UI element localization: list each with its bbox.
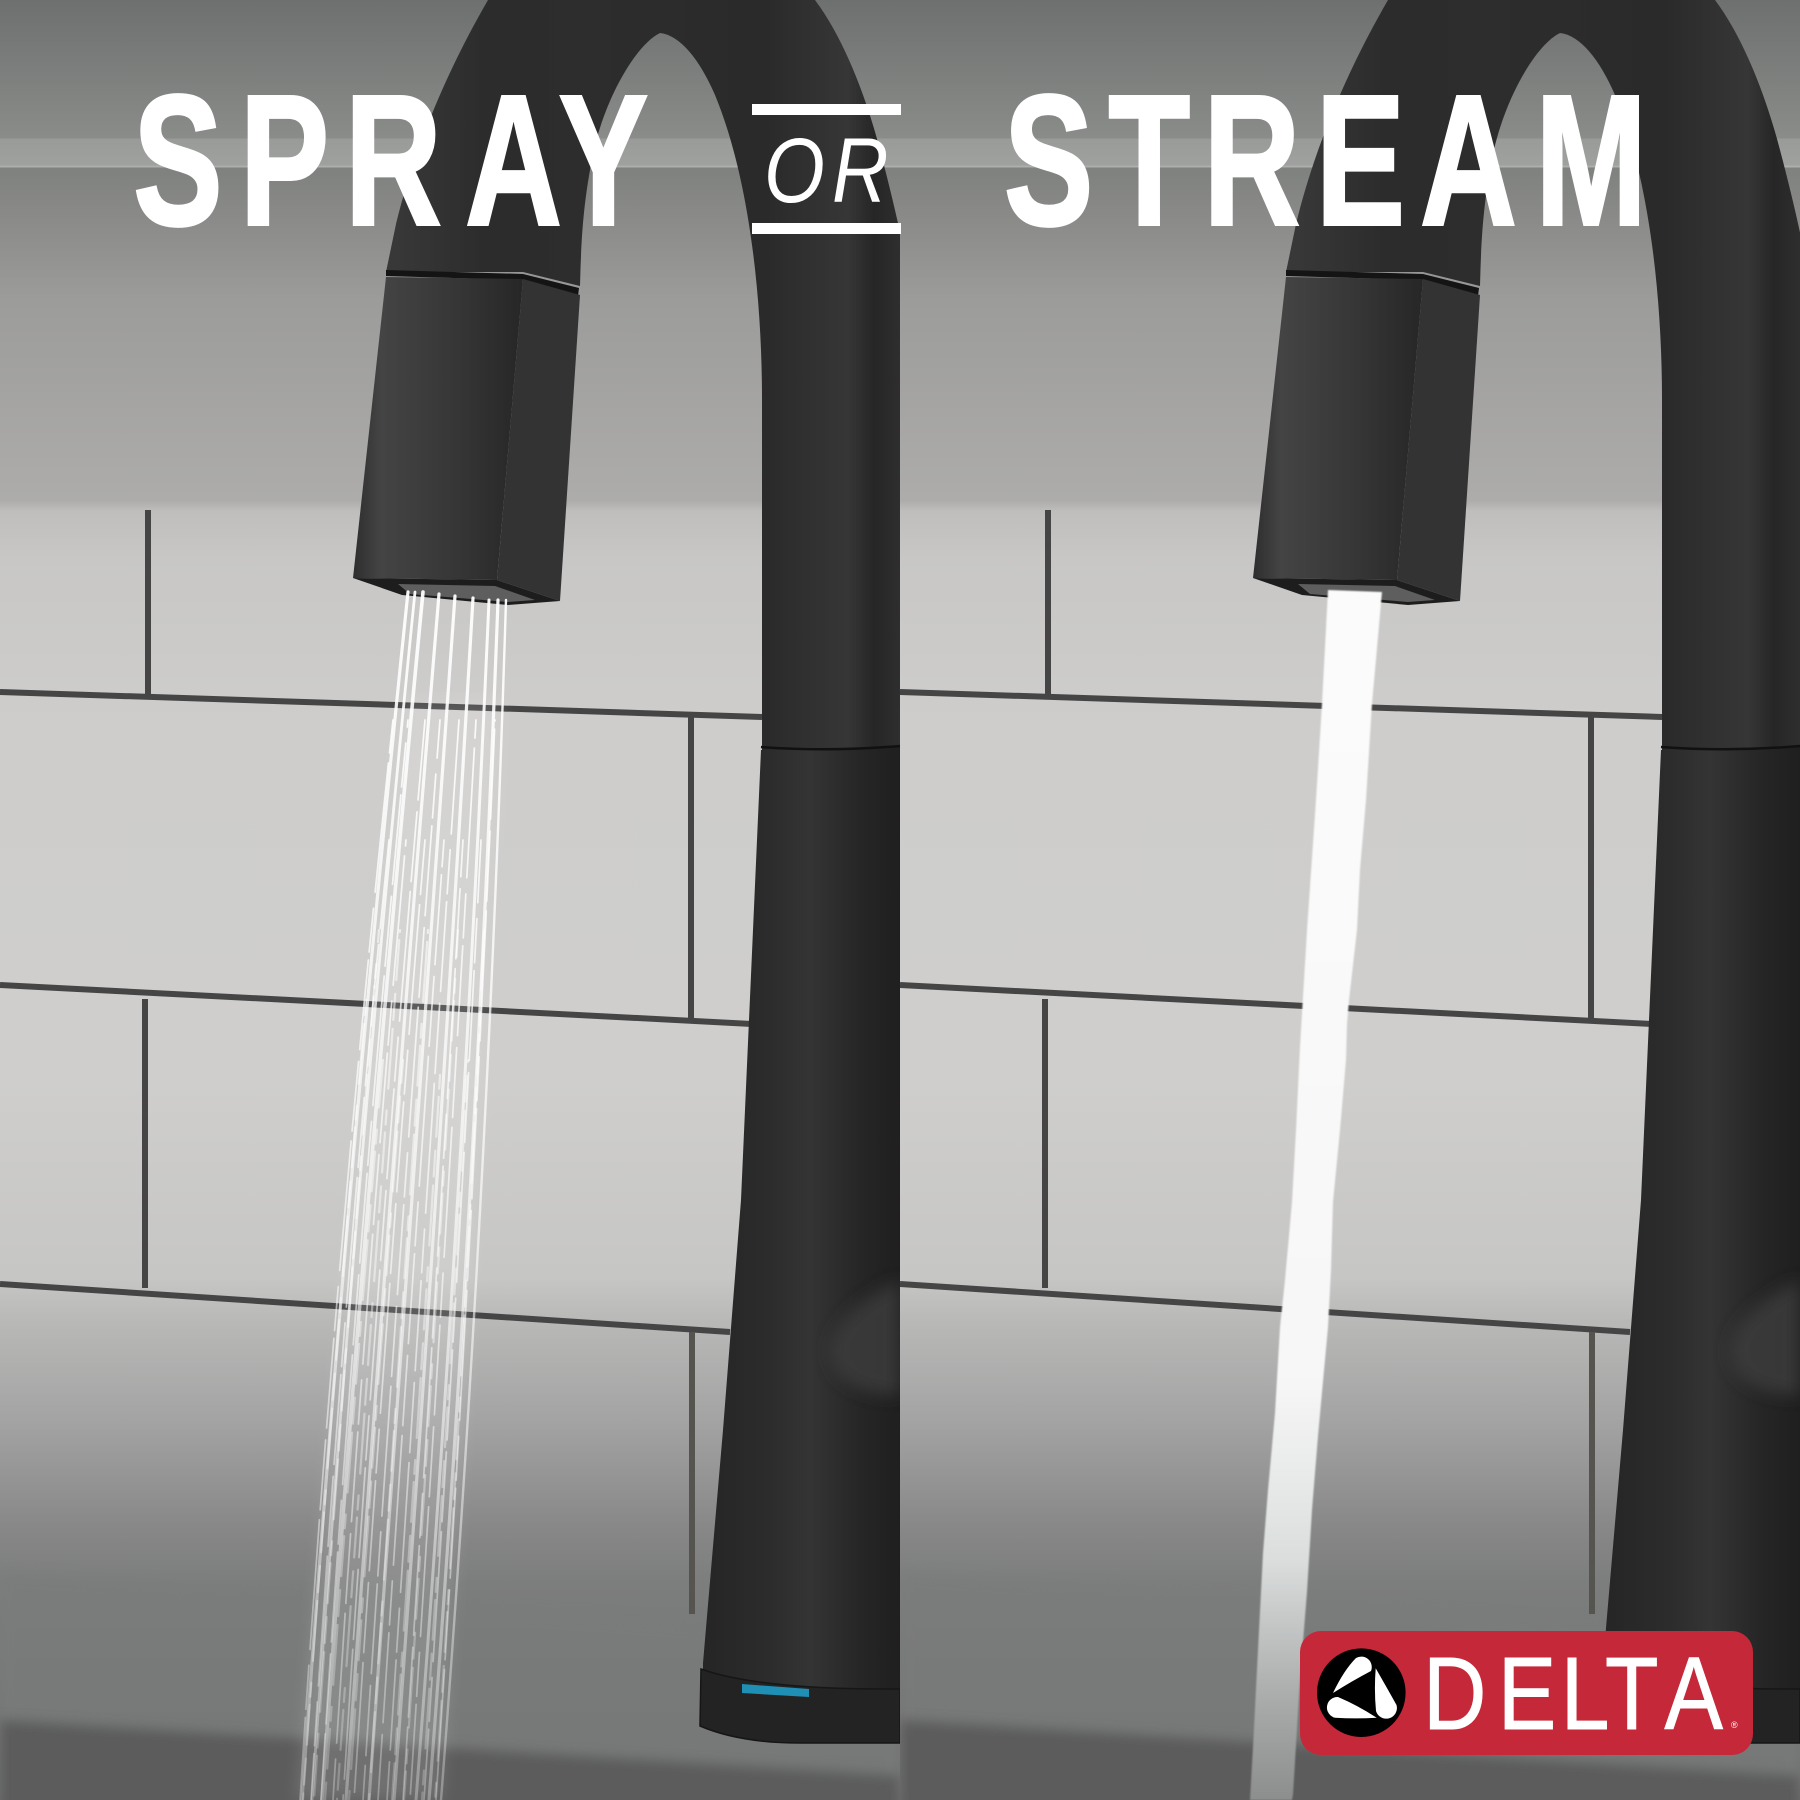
blue LED indicator: [742, 1684, 809, 1697]
spray haze: [296, 700, 500, 1800]
tile grout lines: [900, 510, 1662, 1614]
spray head collar: [1286, 270, 1479, 296]
OR text: OR: [764, 120, 888, 222]
faucet body: [703, 746, 900, 1710]
icon: Delta triangle mark: [1317, 1648, 1406, 1737]
sink edge: [900, 1720, 1800, 1800]
heading: SPRAY: SPRAY: [133, 57, 648, 265]
faucet arch and stem: [1286, 0, 1800, 750]
neck joint: [761, 746, 900, 749]
spray head side face: [497, 279, 580, 601]
badge: OR: [752, 104, 901, 234]
spray head collar: [386, 270, 579, 296]
registered mark: ®: [1731, 1720, 1738, 1730]
wall and tile background: [0, 0, 900, 1800]
tile grout lines: [0, 510, 762, 1614]
logo background: [1300, 1631, 1753, 1755]
wordmark: DELTA: [1423, 1636, 1723, 1752]
aerator nozzles: [1298, 584, 1435, 602]
Delta logo badge: [1300, 1631, 1753, 1755]
spray head front face: [353, 277, 523, 580]
aerator: [353, 578, 560, 605]
spray head side face: [1397, 279, 1480, 601]
sink edge: [0, 1720, 900, 1800]
spray water strands: [300, 592, 506, 1800]
handle lever: [830, 1280, 900, 1395]
neck joint: [1661, 746, 1800, 749]
faucet arch and stem: [386, 0, 900, 750]
faucet body: [1603, 746, 1800, 1710]
OR rule top: [752, 104, 901, 115]
panel: spray mode photo: [0, 0, 900, 1800]
handle lever: [1730, 1280, 1800, 1395]
faucet base ring: [1750, 1688, 1800, 1744]
spray head front face: [1253, 277, 1423, 580]
aerator nozzles: [398, 584, 535, 602]
counter top: [900, 1572, 1800, 1800]
panel: stream mode photo: [900, 0, 1800, 1800]
counter top: [0, 1572, 900, 1800]
OR rule bottom: [752, 223, 901, 234]
faucet base ring: [700, 1669, 900, 1743]
heading: STREAM: STREAM: [1004, 57, 1647, 265]
aerator: [1253, 578, 1460, 605]
wall and tile background: [900, 0, 1800, 1800]
stream water: [1250, 590, 1382, 1800]
